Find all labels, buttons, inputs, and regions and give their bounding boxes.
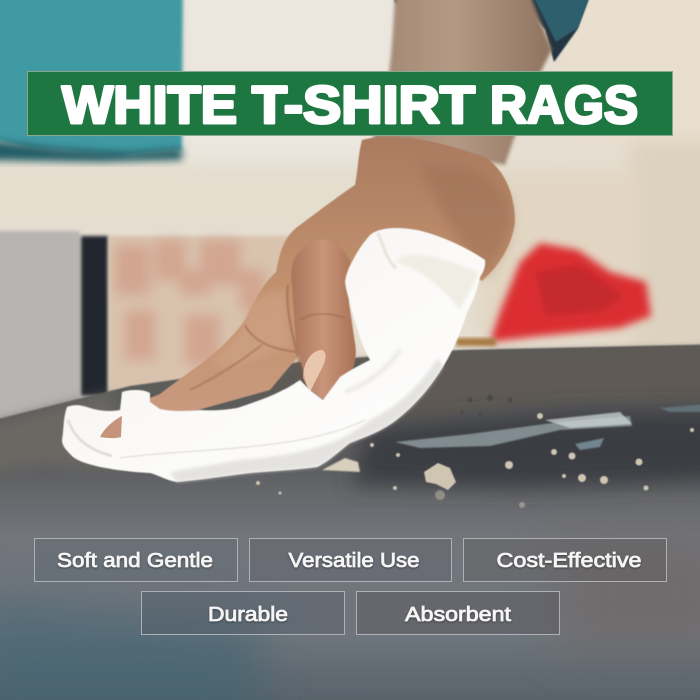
- sleeve dark: [390, 0, 592, 62]
- wooden strip: [456, 338, 496, 346]
- grey pillar and dark strip: [0, 231, 80, 426]
- white t-shirt rag: [62, 228, 485, 482]
- title text: T-SHIRT: [252, 76, 475, 135]
- tag: Soft and Gentle: [34, 538, 238, 582]
- crumbs: [256, 413, 694, 508]
- tag: Absorbent: Absorbent: [405, 604, 512, 626]
- title banner: [28, 72, 672, 136]
- finger shadows: [287, 285, 305, 385]
- tag: Soft and Gentle: Soft and Gentle: [57, 550, 213, 572]
- arm and hand: [125, 0, 552, 418]
- tag: Cost-Effective: Cost-Effective: [496, 550, 642, 572]
- icon: index finger: [291, 240, 356, 400]
- teal cloth: [0, 0, 183, 156]
- icon: lower knuckle shading: [210, 290, 290, 366]
- rag folds: [395, 255, 478, 310]
- tag: Durable: [142, 592, 344, 634]
- icon: fingernail: [303, 350, 326, 392]
- spilled residue: [322, 402, 700, 472]
- table surface: [0, 344, 700, 700]
- title text: WHITE: [62, 76, 237, 135]
- tag: Absorbent: [356, 592, 560, 634]
- tag: Versatile Use: Versatile Use: [288, 550, 420, 572]
- tag: Versatile Use: [250, 538, 452, 582]
- icon: back of hand: [125, 137, 515, 418]
- title text: RAGS: [490, 76, 638, 135]
- fingertip peeking through: [100, 416, 122, 438]
- title text: [62, 76, 638, 135]
- feature tags: [34, 538, 666, 634]
- tag: Cost-Effective: [464, 538, 666, 582]
- icon: forearm: [372, 0, 552, 165]
- red bag: [490, 243, 651, 342]
- tag: Durable: Durable: [208, 604, 288, 626]
- pink patterned cloth: [109, 236, 319, 396]
